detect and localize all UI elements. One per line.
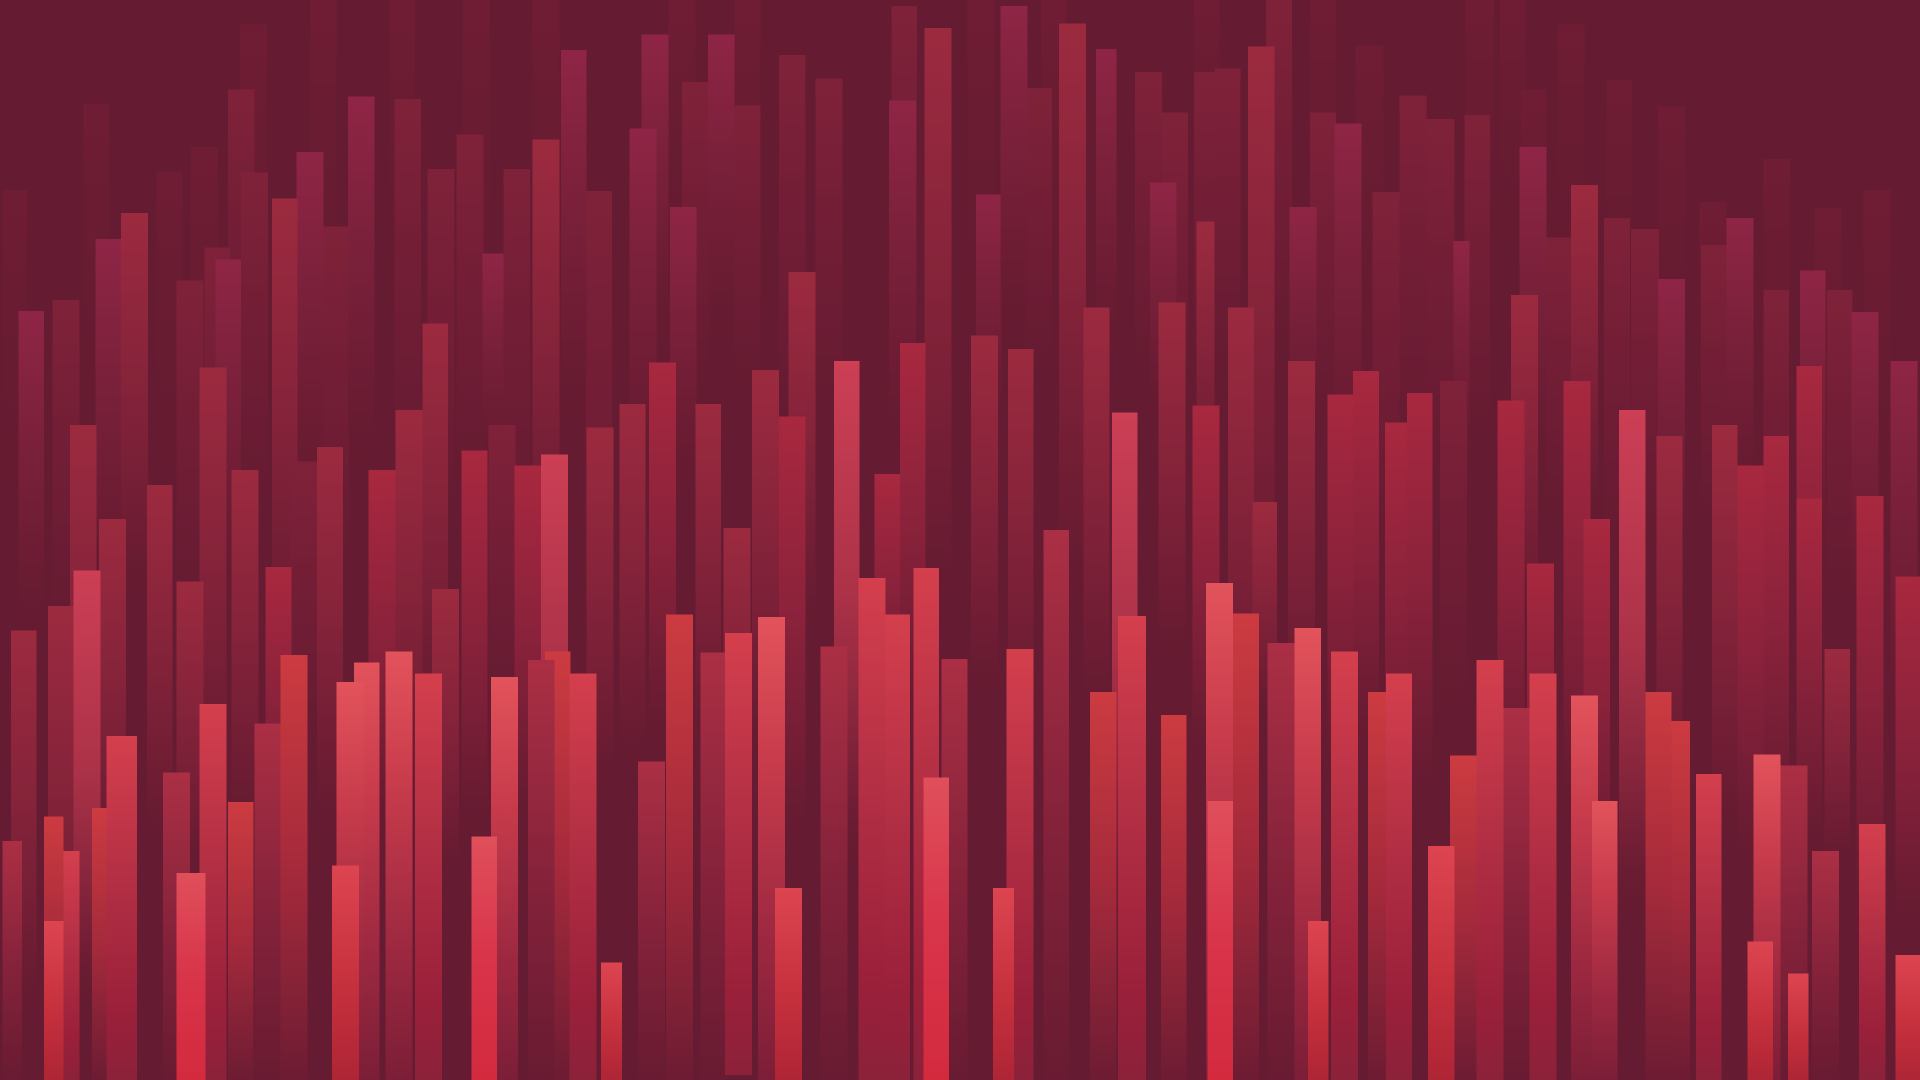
layer: front dark red bars [2,530,1839,1080]
layer: upper muted bars [53,55,1853,681]
layer: bright middle bars [73,361,1646,1011]
layer: middle crimson bars [266,343,1920,944]
layer: brightest short bars [44,778,1920,1080]
layer: front orange-red bars [44,613,1690,1080]
layer: upper purple bars [18,6,1918,729]
layer: front orange-red back bars [545,651,571,1080]
layer: faint back bars [2,0,1891,557]
layer: front highlighted bars [337,583,1780,1080]
layer: front crimson bars [64,568,1886,1080]
layer: dim middle bars [290,381,1467,756]
